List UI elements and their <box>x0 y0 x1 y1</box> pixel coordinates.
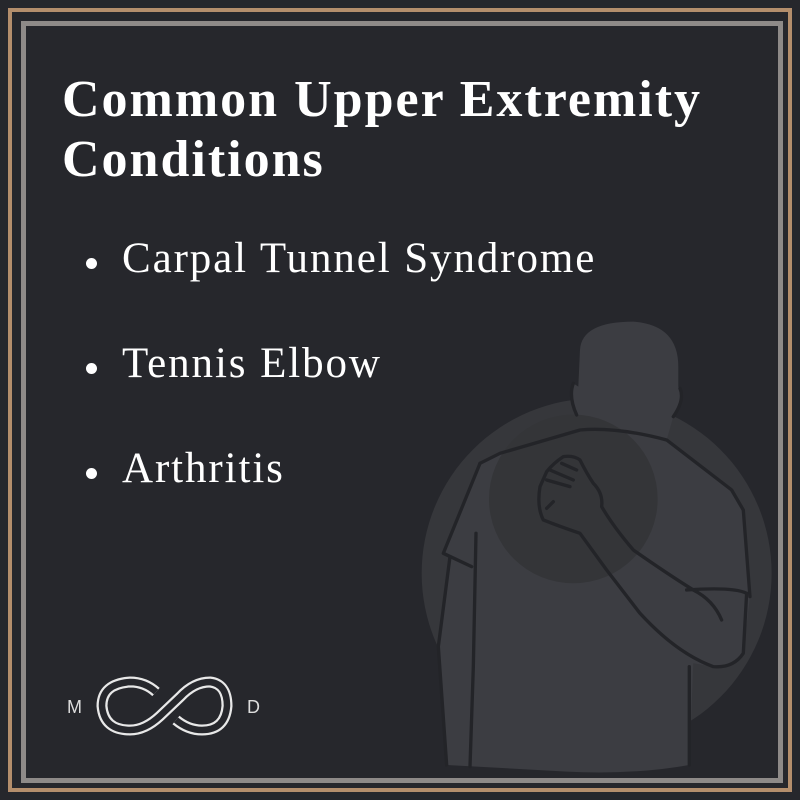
logo: M infinity D: M <box>67 697 82 717</box>
logo: M infinity D <box>67 676 260 736</box>
bullet list <box>86 235 596 492</box>
title <box>62 71 702 188</box>
item: carpal tunnel: Carpal Tunnel Syndrome <box>122 235 596 282</box>
title: Common Upper Extremity <box>62 71 702 128</box>
title: Conditions <box>62 131 325 188</box>
item: tennis elbow: Tennis Elbow <box>122 340 382 387</box>
logo: M infinity D: D <box>247 697 260 717</box>
item: arthritis: Arthritis <box>122 445 285 492</box>
